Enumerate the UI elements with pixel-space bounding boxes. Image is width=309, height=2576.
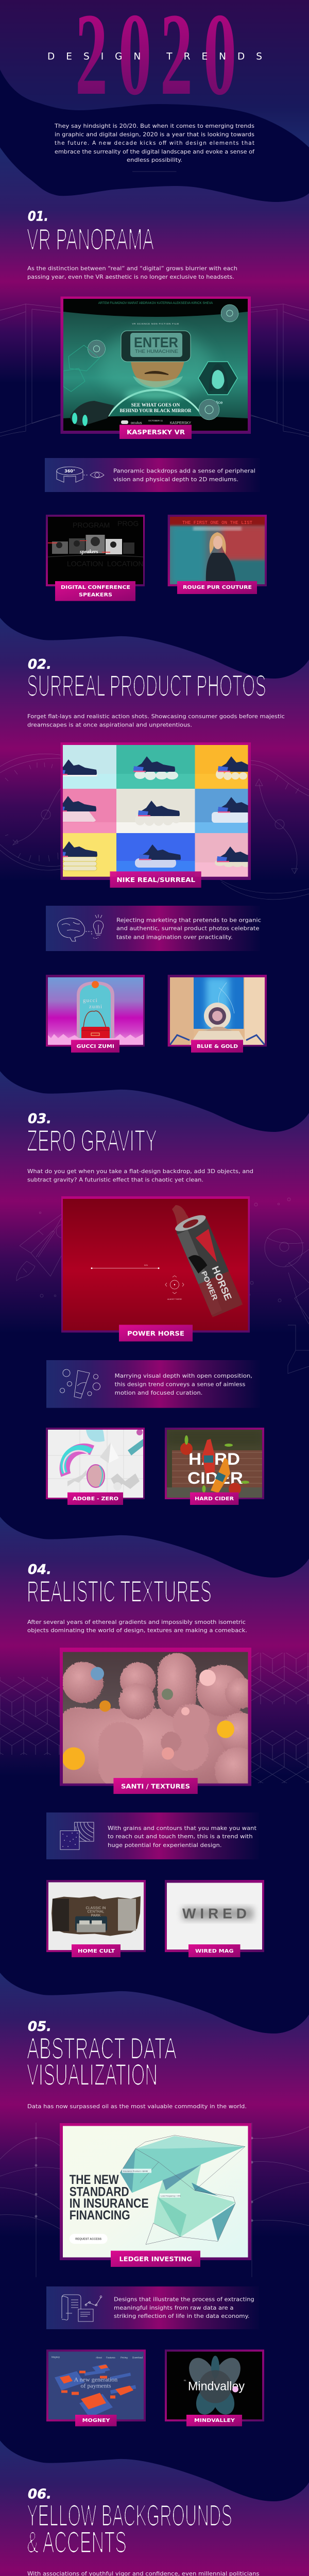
caption label bbox=[110, 871, 201, 888]
section 02: surreal product photos bbox=[0, 657, 309, 1053]
caption label: ADOBE - ZERO bbox=[73, 1496, 118, 1502]
image: speakers page: PROGRAM bbox=[73, 521, 110, 529]
image card: Power Horse bbox=[61, 1196, 250, 1342]
caption label: WIRED MAG bbox=[195, 1948, 234, 1954]
section 03: zero gravity bbox=[16, 1111, 309, 1505]
callout text: Panoramic backdrops add a sense of peripheral bbox=[113, 468, 255, 474]
image: torn paper bedroom bbox=[48, 1883, 144, 1950]
number: 05. bbox=[28, 2019, 52, 2035]
image card: Wired Mag bbox=[165, 1880, 264, 1957]
paragraph bbox=[27, 266, 237, 280]
caption label: HARD CIDER bbox=[195, 1496, 234, 1502]
paragraph: After several years of ethereal gradients and impossibly smooth isometric bbox=[27, 1619, 246, 1625]
heading: ABSTRACT DATA bbox=[27, 2032, 177, 2065]
number: 03. bbox=[28, 1111, 52, 1127]
image: Kaspersky poster: ARTEM FILIMONOV MARAT ABDRAKOV KATERINA ALEKSEEVA KIRICK SHEVA bbox=[98, 302, 213, 305]
callout text bbox=[114, 2297, 254, 2319]
image: Wired 3D type bbox=[167, 1883, 262, 1950]
image: Ledger landing page: STANDARD bbox=[70, 2184, 129, 2199]
callout text: to reach out and touch them, this is a trend with bbox=[108, 1834, 253, 1840]
image: Ledger landing page: FINANCING bbox=[70, 2208, 130, 2223]
number: 06. bbox=[28, 2486, 52, 2502]
image: Rouge Pur bbox=[170, 517, 265, 584]
paragraph: subtract gravity? A futuristic effect that is chaotic yet clean. bbox=[27, 1177, 203, 1183]
image: Gucci: zumi bbox=[89, 1004, 102, 1010]
callout text bbox=[115, 1373, 252, 1396]
callout text: and authentic, surreal product photos celebrate bbox=[116, 926, 260, 932]
image: Mindvalley mesh: 01 bbox=[184, 2379, 186, 2381]
image: energy can: HORSE bbox=[209, 1265, 233, 1302]
icon: tube and bubbles bbox=[60, 1369, 100, 1398]
caption label: BLUE & GOLD bbox=[197, 1044, 238, 1049]
image card: Hard Cider bbox=[164, 1428, 265, 1505]
image: Ledger landing page: Loss Frequency: +9% bbox=[161, 2195, 181, 2197]
caption label bbox=[177, 581, 257, 594]
image: fluffy pink shapes bbox=[63, 1652, 248, 1784]
intro paragraph: embrace the surreality of the digital landscape and evoke a sense of bbox=[55, 149, 254, 155]
callout bbox=[45, 458, 260, 492]
image: speakers page bbox=[48, 517, 144, 584]
caption label: LEDGER INVESTING bbox=[119, 2256, 192, 2263]
image card: Mindvalley bbox=[165, 2349, 264, 2426]
icon: texture swatches bbox=[60, 1822, 94, 1850]
image: Mogney QR landscape: of payments bbox=[80, 2382, 111, 2389]
image card: Adobe - Zero bbox=[46, 1428, 145, 1505]
callout text: meaningful insights from raw data are a bbox=[114, 2305, 234, 2311]
image: Kaspersky poster: BEHIND YOUR BLACK MIRROR bbox=[120, 408, 192, 413]
caption label bbox=[67, 1493, 123, 1505]
image: Mogney QR landscape: Mogney bbox=[52, 2355, 60, 2359]
image: hard cider wall: HARD bbox=[188, 1450, 240, 1468]
image card: Blue & Gold bbox=[168, 975, 267, 1053]
image card: Kaspersky VR bbox=[61, 297, 251, 501]
image: Ledger landing page: THE NEW bbox=[70, 2173, 119, 2187]
paragraph: dreamscapes is at once aspirational and unpretentious. bbox=[27, 722, 192, 728]
callout text: vision and physical depth to 2D mediums. bbox=[113, 477, 238, 483]
heading: ZERO GRAVITY bbox=[27, 1124, 157, 1158]
callout text bbox=[108, 1825, 256, 1849]
caption label bbox=[111, 2251, 200, 2267]
image: speakers page: PROG bbox=[117, 519, 139, 528]
number: 04. bbox=[28, 1562, 52, 1578]
number: 02. bbox=[28, 657, 52, 672]
caption label: MINDVALLEY bbox=[194, 2418, 235, 2424]
intro paragraph: They say hindsight is 20/20. But when it comes to emerging trends bbox=[54, 123, 254, 129]
image: Mogney QR landscape: Pricing bbox=[121, 2357, 128, 2359]
caption label bbox=[119, 425, 192, 439]
callout text: taste and imagination over practicality. bbox=[116, 934, 233, 940]
image: Kaspersky poster: KASPERSKY bbox=[170, 420, 191, 425]
caption label bbox=[55, 581, 135, 601]
caption label: SANTI / TEXTURES bbox=[121, 1783, 190, 1790]
icon: 360 panorama and eye bbox=[57, 467, 104, 482]
image: Ledger landing page bbox=[63, 2126, 248, 2258]
caption label: MOGNEY bbox=[82, 2418, 110, 2424]
image: shoe grid bbox=[63, 745, 248, 877]
paragraph: Forget flat-lays and realistic action shots. Showcasing consumer goods before majestic bbox=[27, 714, 285, 720]
section 04: realistic textures bbox=[0, 1562, 309, 1957]
section 01: VR panorama bbox=[0, 209, 309, 601]
image: Mogney QR landscape: Download bbox=[132, 2357, 143, 2359]
image: Kaspersky poster: Alice bbox=[213, 400, 223, 405]
section 05: abstract data visualization bbox=[0, 2019, 309, 2426]
icon: brain and bulb bbox=[58, 914, 104, 941]
image card: Ledger Investing bbox=[60, 2123, 251, 2267]
heading bbox=[27, 2032, 177, 2092]
image: Kaspersky poster: oculus bbox=[131, 420, 142, 425]
callout bbox=[46, 1812, 259, 1859]
image card: Digital Conference Speakers bbox=[46, 515, 145, 601]
image: torn paper bedroom: CLASSIC IN bbox=[86, 1906, 106, 1910]
image: Kaspersky poster: SEE WHAT GOES ON bbox=[131, 403, 180, 408]
image: speakers page: speakers bbox=[79, 549, 98, 555]
image: hard cider wall: CIDER bbox=[187, 1469, 243, 1487]
caption label bbox=[188, 1944, 240, 1957]
callout text: Designs that illustrate the process of extracting bbox=[114, 2297, 254, 2303]
number: 01. bbox=[28, 209, 48, 225]
image: hard cider wall bbox=[167, 1430, 262, 1498]
big 2020 numerals bbox=[75, 0, 236, 120]
paragraph: What do you get when you take a flat-design backdrop, add 3D objects, and bbox=[27, 1168, 253, 1175]
callout bbox=[46, 906, 261, 951]
image: Ledger landing page: IN INSURANCE bbox=[70, 2196, 149, 2211]
callout text: huge potential for experiential design. bbox=[108, 1842, 221, 1849]
subtitle: DESIGN TRENDS bbox=[47, 52, 262, 62]
dial and loop line art bbox=[0, 754, 309, 900]
image card: Rouge Pur Couture bbox=[167, 514, 268, 594]
caption label: POWER HORSE bbox=[127, 1330, 184, 1337]
image: Mogney QR landscape: About bbox=[96, 2357, 102, 2359]
intro paragraph bbox=[54, 123, 254, 163]
caption label: KASPERSKY VR bbox=[127, 429, 185, 436]
paragraph bbox=[27, 1619, 247, 1634]
image: Kaspersky poster: VR SCIENCE NON-FICTION FILM bbox=[132, 323, 179, 325]
data wave line art bbox=[0, 2123, 309, 2277]
image card: Nike Real/Surreal bbox=[53, 742, 260, 888]
caption label: GUCCI ZUMI bbox=[76, 1044, 114, 1049]
image: speakers page: LOCATION bbox=[67, 560, 104, 568]
image: torn paper bedroom: PARK bbox=[91, 1914, 101, 1918]
image: Gucci: gucci bbox=[83, 997, 98, 1004]
caption label bbox=[190, 1493, 238, 1505]
caption label: NIKE REAL/SURREAL bbox=[116, 876, 195, 884]
header: title area bbox=[0, 0, 309, 202]
heading: & ACCENTS bbox=[27, 2526, 127, 2560]
image: Adobe 3D shapes bbox=[48, 1430, 143, 1498]
rocket, astronaut and bubble line art bbox=[16, 1198, 309, 1374]
caption label bbox=[113, 1778, 198, 1794]
paragraph: passing year, even the VR aesthetic is no longer exclusive to headsets. bbox=[27, 274, 234, 280]
caption label bbox=[72, 1944, 121, 1957]
image: Mogney QR landscape: A new generation bbox=[74, 2376, 117, 2383]
image: Mogney QR landscape bbox=[48, 2351, 144, 2419]
image card: Gucci Zumi bbox=[46, 975, 145, 1053]
intro paragraph: endless possibility. bbox=[127, 157, 182, 163]
callout text: With grains and contours that you make you want bbox=[108, 1825, 256, 1832]
image: speakers page: LOCATION bbox=[107, 560, 144, 568]
image: Mogney QR landscape: Features bbox=[106, 2357, 116, 2359]
image card: Santi / Textures bbox=[53, 1648, 262, 1794]
heading: VISUALIZATION bbox=[27, 2058, 158, 2092]
image: Blue and gold bbox=[170, 977, 265, 1045]
image: energy can: POWER bbox=[200, 1269, 219, 1301]
caption label: DIGITAL CONFERENCE bbox=[61, 585, 130, 590]
caption label bbox=[191, 1040, 243, 1053]
image: Kaspersky poster: OCTOBER 11 bbox=[148, 419, 163, 422]
paragraph: Data has now surpassed oil as the most valuable commodity in the world. bbox=[27, 2104, 247, 2110]
image: Mindvalley mesh bbox=[167, 2351, 262, 2419]
image: Wired 3D type: WIRED bbox=[182, 1905, 247, 1922]
image card: Mogney bbox=[46, 2349, 146, 2426]
image: Ledger landing page: REQUEST ACCESS bbox=[75, 2238, 101, 2241]
intro blob bbox=[0, 70, 309, 202]
panorama line art bbox=[0, 304, 309, 436]
callout text: this design trend conveys a sense of aimless bbox=[115, 1382, 245, 1388]
caption label bbox=[75, 2415, 116, 2426]
paragraph: objects dominating the world of design, textures are making a comeback. bbox=[27, 1628, 247, 1634]
callout text: Rejecting marketing that pretends to be organic bbox=[116, 917, 261, 923]
paragraph bbox=[27, 714, 285, 728]
cube pattern line art bbox=[0, 1653, 309, 1783]
caption label: ROUGE PUR COUTURE bbox=[183, 585, 252, 590]
image: Ledger landing page: Insurance Premium +$44M bbox=[123, 2170, 148, 2172]
image: Gucci bbox=[48, 977, 143, 1045]
heading: VR PANORAMA bbox=[27, 223, 154, 257]
heading bbox=[27, 2499, 232, 2560]
intro paragraph: in graphic and digital design, 2020 is a year that is looking towards bbox=[55, 132, 254, 138]
caption label: HOME CULT bbox=[78, 1948, 115, 1954]
callout text: striking reflection of life in the data economy. bbox=[114, 2313, 249, 2319]
image: energy can: ALMOST THERE! bbox=[167, 1298, 182, 1300]
callout text bbox=[116, 917, 261, 940]
image: Rouge Pur: THE FIRST ONE ON THE LIST bbox=[182, 520, 252, 526]
intro paragraph: the future. A new decade kicks off with design elements that bbox=[55, 140, 254, 146]
image: Kaspersky poster bbox=[63, 299, 248, 431]
image: Kaspersky poster: THE HUMACHINE bbox=[135, 349, 178, 354]
image: energy can bbox=[63, 1199, 248, 1330]
section 06: yellow backgrounds and accents bbox=[0, 2486, 297, 2576]
caption label bbox=[119, 1325, 193, 1342]
caption label: SPEAKERS bbox=[79, 592, 112, 598]
paragraph bbox=[27, 1168, 253, 1183]
image: Mindvalley mesh: Mindvalley bbox=[188, 2379, 245, 2394]
callout text: Marrying visual depth with open composition, bbox=[115, 1373, 252, 1379]
callout bbox=[46, 2286, 259, 2329]
image: Kaspersky poster: ENTER bbox=[134, 334, 178, 350]
caption label bbox=[71, 1040, 119, 1053]
caption label bbox=[186, 2415, 242, 2426]
callout text: motion and focused curation. bbox=[115, 1390, 202, 1396]
icon: 360 panorama and eye: 360° bbox=[64, 469, 75, 473]
icon: scroll, documents and graph bbox=[62, 2295, 102, 2321]
callout bbox=[46, 1360, 260, 1408]
callout text bbox=[113, 468, 255, 483]
image: energy can: 51% bbox=[144, 1264, 148, 1266]
image card: Home Cult bbox=[46, 1880, 146, 1957]
paragraph: As the distinction between “real” and “digital” grows blurrier with each bbox=[27, 266, 237, 272]
image: torn paper bedroom: CENTRAL bbox=[88, 1910, 104, 1913]
